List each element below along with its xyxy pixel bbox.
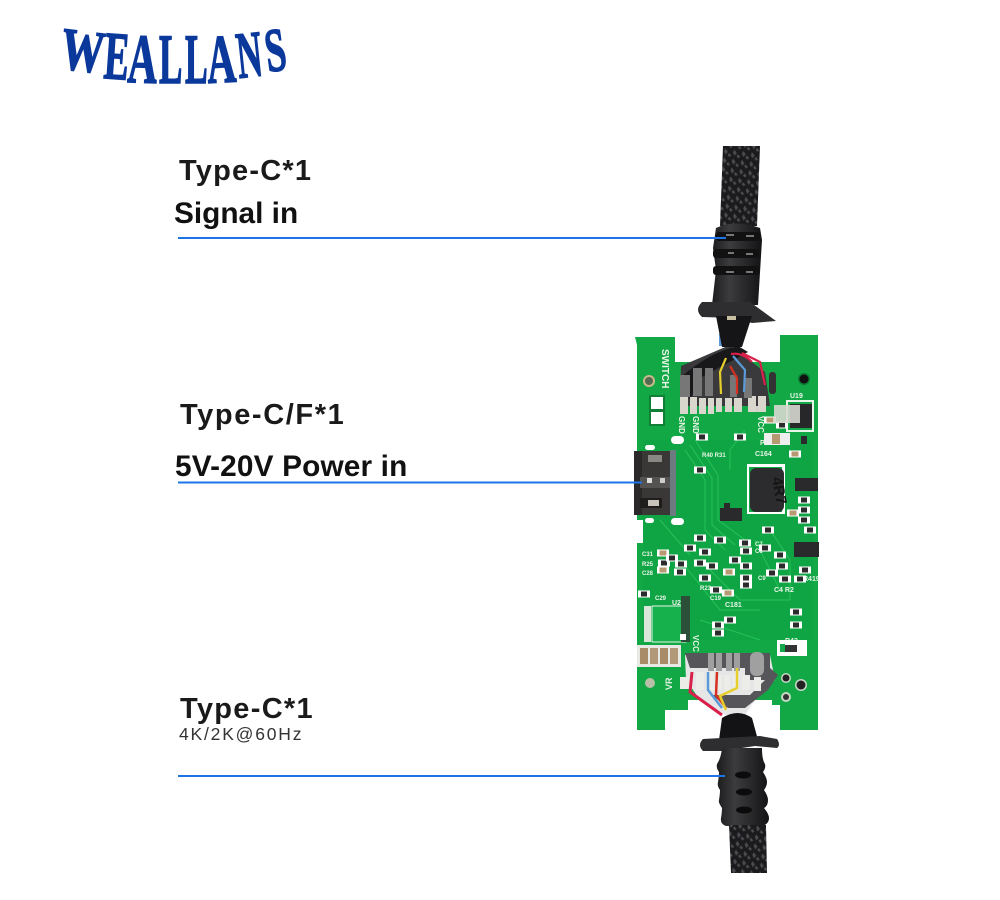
silkscreen labels: R40 R31 (702, 453, 726, 459)
silkscreen labels: U20 (672, 600, 685, 607)
silkscreen labels: C31 (642, 552, 654, 558)
trace lines (660, 430, 790, 640)
switch pads (649, 395, 665, 426)
bottom cable with strain relief (700, 713, 779, 873)
logo: WEALLANS: A (126, 21, 159, 99)
leader line: power in (178, 482, 642, 484)
inductor: 4R7 (768, 476, 790, 506)
logo: WEALLANS: A (205, 22, 238, 99)
silkscreen labels: C181 (725, 602, 742, 609)
silkscreen labels: C4 R2 (774, 587, 794, 594)
chip U20 (644, 596, 690, 642)
silkscreen labels: C7 (755, 542, 763, 548)
silkscreen labels: PC7 (760, 440, 774, 447)
label: Signal in: Signal in (174, 197, 298, 230)
top cable with strain relief (698, 146, 776, 347)
silkscreen labels: C164 (755, 451, 772, 458)
leader line: 4K output (178, 775, 725, 777)
silkscreen labels: R419 (803, 576, 820, 583)
rubber collar (717, 748, 769, 826)
neck (716, 316, 752, 347)
silkscreen labels: R23 (700, 586, 712, 592)
logo: WEALLANS: N (233, 18, 266, 93)
silkscreen labels: U19 (790, 393, 803, 400)
top solder joints and wires (680, 334, 776, 414)
silkscreen labels: C28 (642, 571, 654, 577)
neck (719, 713, 758, 740)
braided sleeve (729, 825, 767, 873)
board outline (635, 335, 818, 730)
silkscreen labels: VCC (691, 635, 700, 652)
logo: WEALLANS (57, 16, 290, 100)
silkscreen labels: VR (664, 677, 674, 690)
silkscreen labels: VCC (756, 416, 765, 433)
rubber collar (712, 224, 762, 305)
silkscreen labels: C6 (755, 549, 763, 555)
leader line: signal in (178, 237, 726, 239)
circuit board (634, 334, 820, 730)
heading: top Type-C*1: Type-C*1 (179, 155, 312, 187)
inductor (747, 464, 790, 514)
label: 4K/2K@60Hz: 4K/2K@60Hz (179, 724, 303, 744)
heading: bottom Type-C*1: Type-C*1 (180, 693, 314, 725)
logo: WEALLANS: S (261, 16, 290, 86)
heading: Type-C/F*1: Type-C/F*1 (180, 399, 345, 431)
logo: WEALLANS: W (57, 16, 108, 87)
silkscreen labels: C9 (758, 576, 766, 582)
silkscreen labels: SWITCH (659, 349, 670, 388)
silkscreen labels: R25 (642, 562, 654, 568)
connector: Type-C female (634, 436, 684, 525)
flange (698, 302, 776, 323)
small components (638, 402, 816, 656)
silkscreen labels: GND (691, 416, 700, 434)
braided sleeve (720, 146, 760, 226)
chip U19 (786, 400, 814, 432)
logo: WEALLANS: L (185, 21, 208, 100)
silkscreen labels: C29 (655, 596, 667, 602)
flange (700, 736, 779, 751)
label: 5V-20V Power in: 5V-20V Power in (175, 450, 407, 483)
logo: WEALLANS: E (102, 17, 132, 95)
silkscreen labels: R43 (785, 638, 798, 645)
silkscreen labels (642, 349, 820, 690)
transistors (720, 436, 819, 557)
capacitor row (637, 645, 681, 667)
bottom solder joints and wires (680, 652, 778, 715)
silkscreen labels: C19 (710, 596, 722, 602)
mounting holes (643, 373, 810, 702)
logo: WEALLANS: L (159, 21, 182, 99)
silkscreen labels: GND (677, 416, 686, 434)
